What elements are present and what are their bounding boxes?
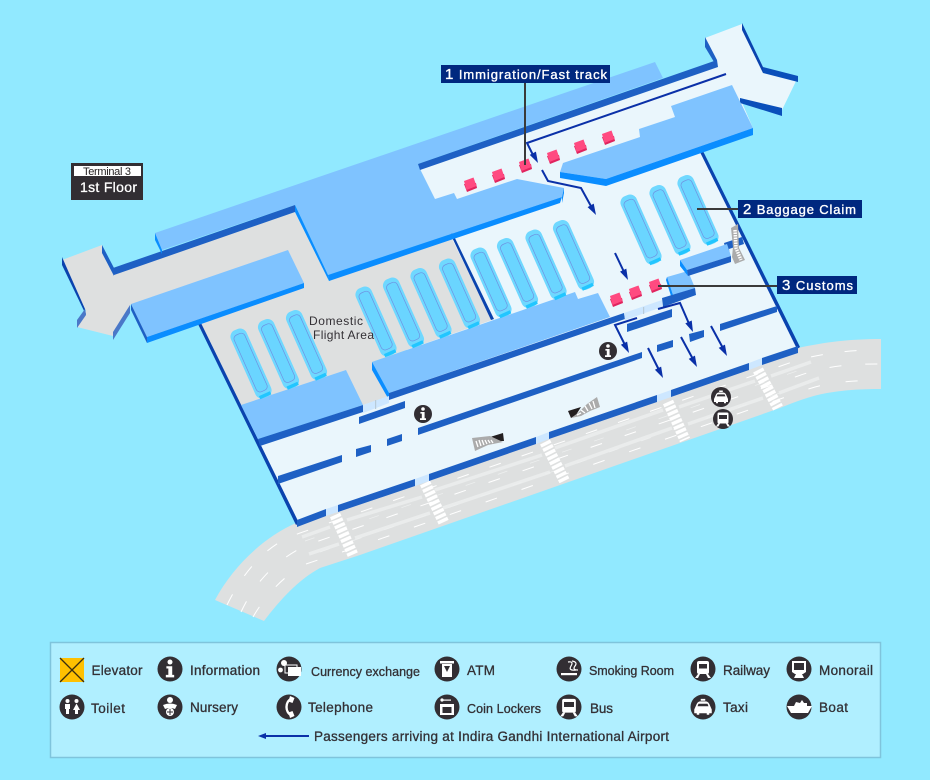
interior walls <box>278 306 798 527</box>
carousels: baggage claim <box>618 173 721 267</box>
title: terminal and floor <box>71 163 143 200</box>
legend: toilet <box>60 694 125 720</box>
label: domestic flight area <box>309 314 374 342</box>
legend: railway: Railway <box>723 663 770 678</box>
legend: bus: Bus <box>590 701 613 716</box>
legend: elevator <box>60 658 143 682</box>
carousels: domestic right <box>353 256 482 359</box>
callout: customs <box>658 276 857 294</box>
callout: baggage claim: 2 Baggage Claim <box>743 201 856 218</box>
roof block: central <box>372 292 625 400</box>
legend: information <box>157 656 260 682</box>
carousels: domestic left <box>228 308 329 401</box>
icon: information east <box>599 342 617 360</box>
escalator: east <box>568 397 600 418</box>
legend: nursery <box>158 694 238 720</box>
floor: domestic flight area <box>62 212 492 405</box>
legend: currency exchange <box>276 656 420 682</box>
legend: railway <box>690 656 770 682</box>
panel: legend <box>50 642 880 758</box>
roof block: north-east <box>560 85 753 186</box>
escalator: baggage hall <box>731 224 745 264</box>
immigration counters <box>464 130 615 192</box>
legend: monorail <box>786 656 873 682</box>
title: terminal and floor: 1st Floor <box>80 179 137 195</box>
legend: bus <box>556 694 613 720</box>
right wing edges <box>705 23 798 116</box>
callout: immigration: 1 Immigration/Fast track <box>445 66 608 83</box>
callout: baggage claim <box>697 200 862 218</box>
legend: boat: Boat <box>819 700 848 715</box>
legend: smoking room: Smoking Room <box>589 664 674 678</box>
label: domestic flight area: Flight Area <box>313 328 374 342</box>
roof block: north concourse <box>113 60 718 281</box>
legend: ATM <box>434 656 495 682</box>
legend: coin lockers: Coin Lockers <box>467 702 541 716</box>
icon: information west <box>414 405 432 423</box>
left wing edges <box>62 245 130 340</box>
icon: bus stop <box>713 409 733 429</box>
legend: nursery: Nursery <box>190 700 238 715</box>
legend: telephone: Telephone <box>308 700 373 715</box>
customs counters <box>610 278 662 307</box>
carousels: international centre <box>468 218 596 320</box>
icon: taxi stand <box>711 387 731 407</box>
roof block: west pier <box>131 250 304 343</box>
roof block: customs side <box>662 271 696 307</box>
callout: immigration <box>441 65 610 165</box>
legend: toilet: Toilet <box>91 701 125 716</box>
legend: passenger route arrow: Passengers arriving at Indira Gandhi International Airport <box>314 729 669 744</box>
legend: coin lockers <box>434 694 541 720</box>
label: domestic flight area: Domestic <box>309 314 363 328</box>
legend: taxi: Taxi <box>723 700 748 715</box>
roof block: baggage side <box>680 237 744 276</box>
legend: currency exchange: Currency exchange <box>311 665 420 679</box>
road <box>215 339 881 621</box>
legend: boat <box>786 694 848 720</box>
legend: telephone <box>276 694 373 720</box>
legend: information: Information <box>190 663 260 678</box>
legend: taxi <box>690 694 748 720</box>
door: customs exit <box>624 300 662 320</box>
perimeter walls <box>197 147 800 525</box>
floor: international arrivals area <box>258 24 798 523</box>
escalator: west <box>472 433 504 451</box>
arrows: passenger route <box>527 74 730 380</box>
callout: customs: 3 Customs <box>782 277 854 294</box>
title: terminal and floor: Terminal 3 <box>83 166 131 178</box>
legend: ATM: ATM <box>467 663 495 678</box>
roof block: south-west <box>241 370 363 446</box>
legend: monorail: Monorail <box>819 663 873 678</box>
legend: elevator: Elevator <box>92 663 143 678</box>
door: domestic <box>363 396 389 413</box>
legend: smoking room <box>556 656 674 682</box>
